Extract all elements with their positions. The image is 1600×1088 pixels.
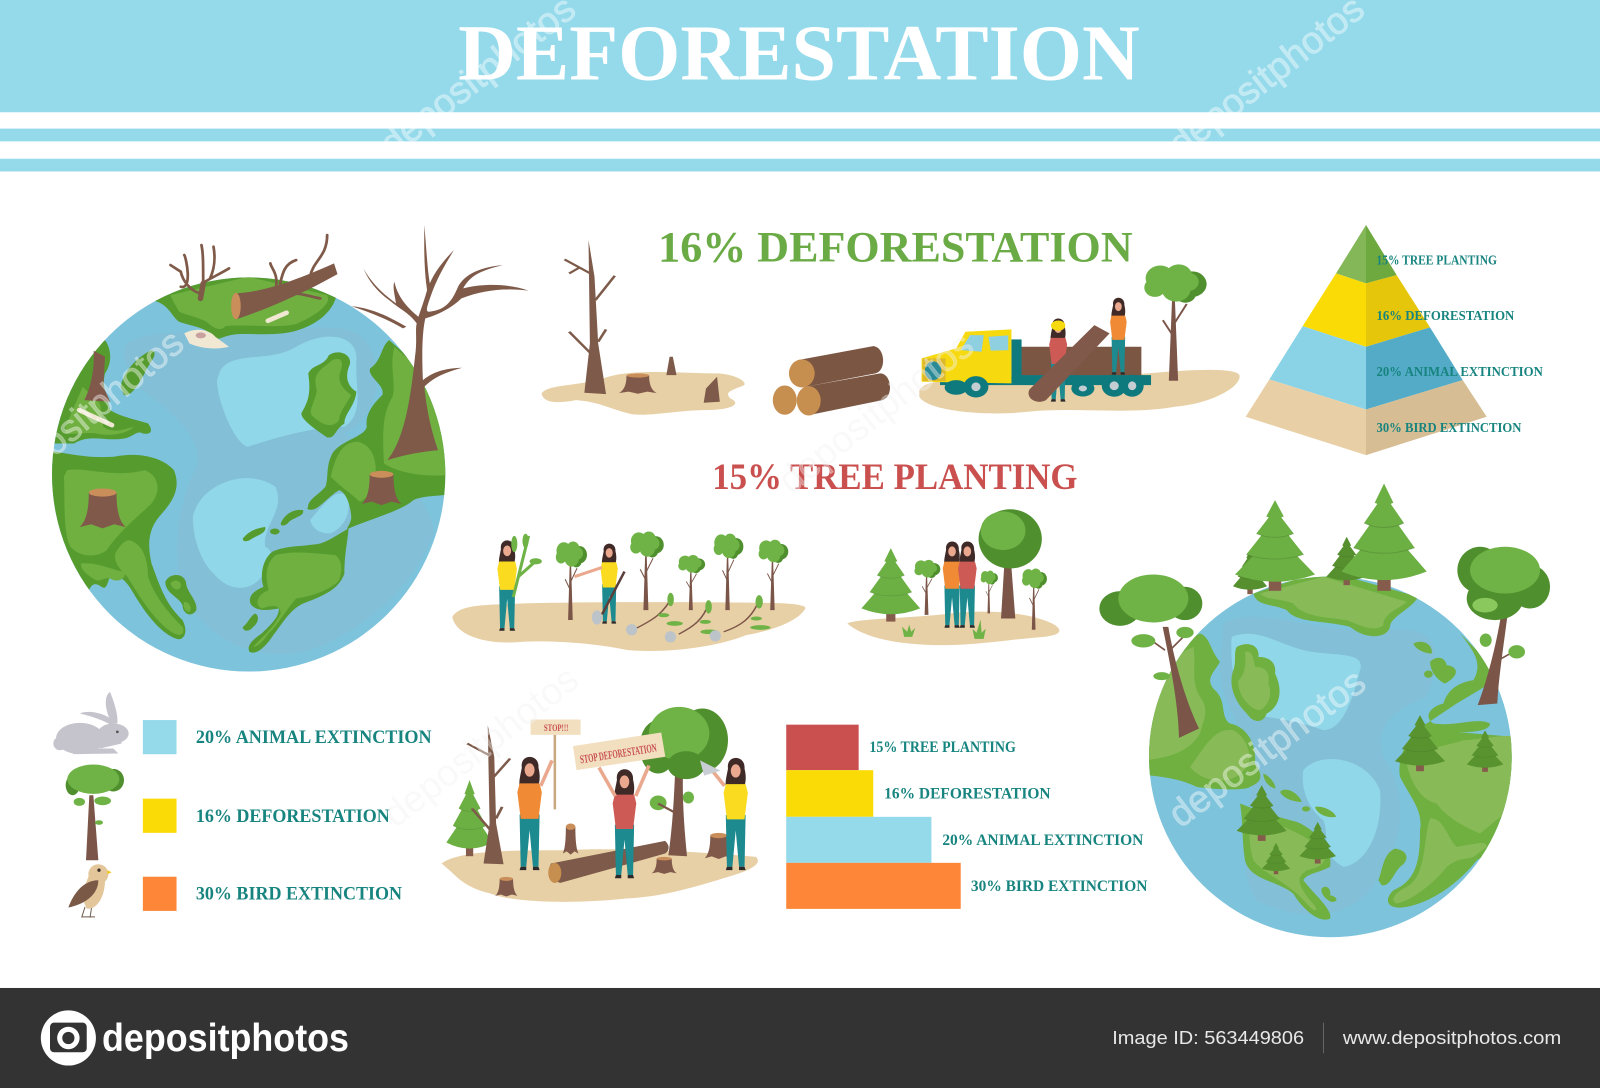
bar chart labels: 16% DEFORESTATION [884, 786, 1051, 803]
footer logo [41, 1010, 349, 1066]
pyramid chart [1246, 225, 1487, 455]
stump on east continent [362, 471, 401, 505]
legend labels: 16% DEFORESTATION [196, 806, 390, 827]
footer website: www.depositphotos.com [1342, 1027, 1561, 1048]
bar chart labels: 30% BIRD EXTINCTION [971, 878, 1147, 895]
watermarks: depositphotos [770, 323, 981, 501]
16% deforestation heading: 16% DEFORESTATION [658, 223, 1133, 271]
pyramid labels: 15% TREE PLANTING [1377, 252, 1497, 267]
protester in yellow with megaphone [700, 758, 748, 870]
scene: logging truck [919, 329, 1240, 413]
pyramid labels: 16% DEFORESTATION [1377, 308, 1514, 323]
stop deforestation banner [573, 733, 665, 770]
pyramid labels: 30% BIRD EXTINCTION [1377, 420, 1521, 435]
worker in helmet [1049, 319, 1067, 402]
watermarks: depositphotos [375, 657, 586, 835]
legend icon: rabbit [53, 692, 129, 754]
log pile [773, 346, 890, 415]
watermarks [0, 0, 1373, 835]
fallen log end [231, 293, 241, 319]
bar chart labels: 15% TREE PLANTING [869, 739, 1016, 756]
scene: couple among trees [847, 509, 1059, 645]
bar chart labels: 20% ANIMAL EXTINCTION [942, 832, 1143, 849]
bar chart labels [869, 739, 1147, 895]
watermarks: depositphotos [1160, 660, 1373, 835]
tall stump upper left [84, 351, 110, 402]
scene: dead tree and stumps [542, 240, 745, 415]
protester in red [599, 765, 649, 878]
leafy tree right on right globe [1457, 547, 1550, 705]
bones and skull [79, 313, 287, 425]
15% tree planting heading: 15% TREE PLANTING [712, 456, 1078, 497]
legend labels [196, 727, 432, 905]
left globe: deforested earth [34, 225, 529, 672]
footer image id: Image ID: 563449806 [1112, 1027, 1304, 1048]
stop deforestation banner: STOP DEFORESTATION [579, 741, 658, 766]
scene: planting saplings [452, 532, 805, 651]
right globe: restored earth [1099, 483, 1550, 937]
big dead tree on left globe [351, 225, 529, 460]
woman holding sapling [497, 534, 542, 631]
pine trees on right globe [1233, 483, 1503, 874]
tree by truck [1144, 264, 1207, 381]
carried log [1029, 325, 1110, 402]
protester in orange [517, 757, 552, 870]
footer bar [0, 988, 1600, 1088]
dead branches on top of left globe [170, 235, 327, 298]
footer logo: depositphotos [102, 1017, 349, 1060]
stepped bar chart [786, 725, 961, 909]
header banner [0, 0, 1600, 171]
scene: protest [442, 707, 758, 902]
legend labels: 20% ANIMAL EXTINCTION [196, 727, 432, 748]
legend swatches [143, 720, 177, 911]
legend icon: bird [68, 864, 112, 918]
stump on left continent [80, 488, 126, 528]
legend labels: 30% BIRD EXTINCTION [196, 884, 402, 905]
fallen log [236, 263, 338, 319]
pyramid labels: 20% ANIMAL EXTINCTION [1377, 364, 1543, 379]
title: DEFORESTATION [458, 10, 1140, 98]
legend icon: tree [66, 765, 124, 860]
stop sign [531, 720, 581, 809]
worker on truck [1110, 298, 1127, 375]
stop sign: STOP!!! [544, 723, 568, 734]
man digging with shovel [574, 544, 624, 625]
pyramid labels [1377, 252, 1543, 435]
leafy tree left on right globe [1099, 574, 1202, 738]
